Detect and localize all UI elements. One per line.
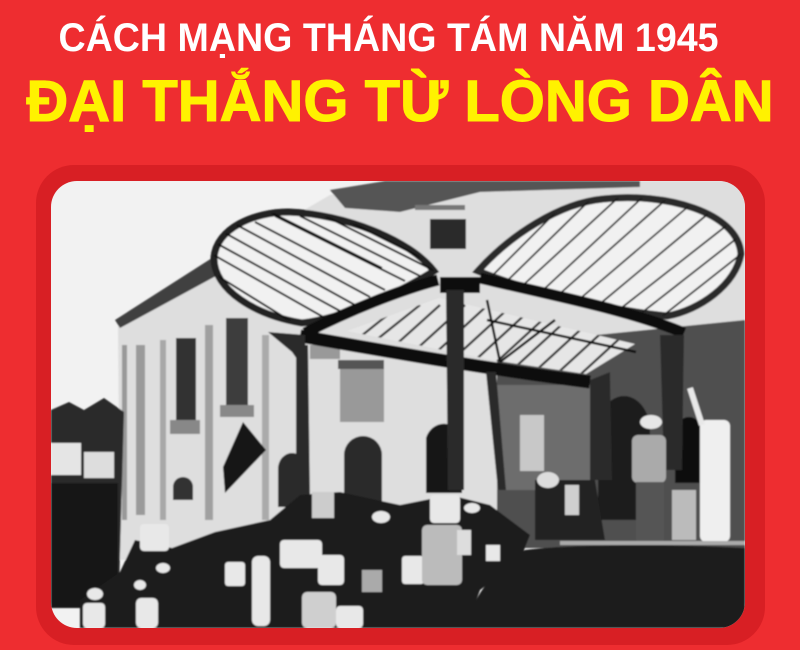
under-canopy bbox=[362, 304, 636, 376]
decorative frame and photograph bbox=[36, 165, 765, 645]
building bbox=[115, 181, 745, 560]
columns bbox=[268, 290, 684, 500]
arches bbox=[344, 436, 382, 513]
title: Cách mạng tháng Tám năm 1945: CÁCH MẠNG THÁNG TÁM NĂM 1945 bbox=[58, 16, 719, 60]
stage figures bbox=[520, 388, 730, 542]
trees bbox=[51, 398, 124, 608]
headline: Đại thắng từ lòng dân: ĐẠI THẮNG TỪ LÒNG DÂN bbox=[26, 69, 774, 134]
photo: Hanoi Opera House 1945 bbox=[51, 181, 750, 628]
crowd bbox=[80, 492, 530, 628]
left canopy lobe bbox=[200, 208, 440, 327]
photo frame bbox=[36, 165, 765, 645]
dark right wing bbox=[497, 320, 745, 548]
right canopy lobe bbox=[478, 195, 750, 322]
canopy beams bbox=[300, 278, 684, 382]
flag bbox=[223, 422, 266, 493]
hill bbox=[465, 545, 745, 628]
